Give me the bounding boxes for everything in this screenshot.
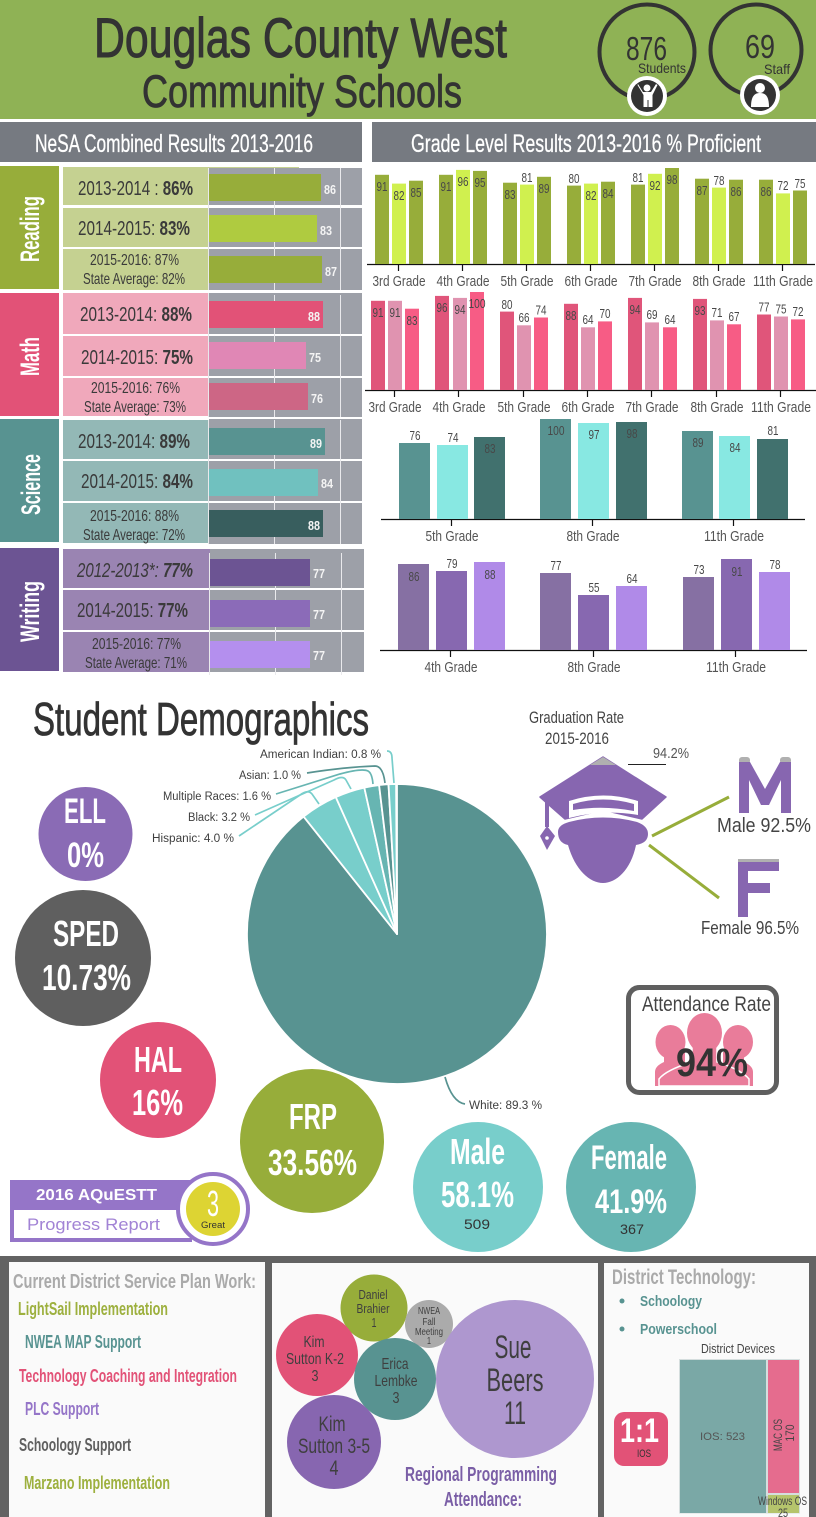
staff stat: Staff bbox=[764, 61, 790, 77]
bubble: Kim Sutton K-2: Kim bbox=[304, 1334, 324, 1351]
bar chart: writing by grade: 78 bbox=[770, 557, 780, 572]
panel: math combined results bbox=[0, 293, 362, 417]
panel: science combined results: 2013-2014: 89% bbox=[78, 431, 190, 453]
attendance rate box: Attendance Rate bbox=[642, 993, 771, 1016]
bar chart: math by grade: 83 bbox=[406, 313, 418, 328]
bar chart: math by grade: 77 bbox=[758, 300, 770, 314]
bubble: Sue Beers: Beers bbox=[486, 1362, 544, 1398]
bar chart: math by grade: 6th Grade bbox=[562, 400, 614, 416]
bubble: Kim Sutton K-2 bbox=[276, 1314, 358, 1396]
bar chart: math by grade: 4th Grade bbox=[432, 400, 486, 416]
panel: writing combined results: 77 bbox=[313, 648, 325, 663]
bar chart: science by grade: 5th Grade bbox=[426, 529, 478, 545]
bar chart: math by grade: 7th Grade bbox=[626, 400, 678, 416]
panel: reading combined results bbox=[0, 166, 362, 290]
panel: math combined results: 88 bbox=[308, 309, 320, 324]
bar chart: reading by grade: 81 bbox=[522, 170, 532, 185]
bar chart: math by grade: 70 bbox=[600, 306, 610, 321]
bar chart: math by grade: 80 bbox=[502, 297, 512, 312]
bar chart: math by grade: 75 bbox=[776, 302, 786, 316]
bubble: Kim Sutton K-2: 3 bbox=[312, 1368, 319, 1385]
bubble: Sue Beers bbox=[436, 1300, 594, 1458]
bar chart: math by grade: 94 bbox=[630, 302, 640, 317]
bar chart: math by grade: 8th Grade bbox=[690, 400, 744, 416]
stat circle: male students: Male bbox=[450, 1131, 505, 1172]
bar chart: writing by grade: 77 bbox=[550, 558, 562, 573]
panel: district service plan: NWEA MAP Support bbox=[25, 1332, 141, 1352]
callout: 1:1 iOS bbox=[614, 1412, 668, 1466]
caption: regional programming bbox=[405, 1464, 557, 1511]
pie chart: race and ethnicity: Asian: 1.0 % bbox=[239, 770, 301, 782]
panel: writing combined results: 77 bbox=[313, 566, 325, 581]
icon: people bbox=[655, 1013, 753, 1086]
students stat: 876 bbox=[626, 30, 667, 67]
AQuESTT progress report badge bbox=[10, 1174, 248, 1244]
stat circle: SPED: SPED bbox=[53, 913, 119, 954]
panel: reading combined results: 2013-2014 : 86% bbox=[78, 178, 193, 200]
bottom band background bbox=[0, 1256, 816, 1517]
stat circle: female students: 367 bbox=[620, 1221, 644, 1237]
bar chart: math by grade: 64 bbox=[582, 312, 594, 327]
bar chart: math by grade: 88 bbox=[566, 308, 576, 323]
bar chart: reading by grade: 6th Grade bbox=[564, 274, 618, 290]
bar chart: reading by grade: 80 bbox=[568, 171, 580, 186]
bar chart: math by grade: 5th Grade bbox=[498, 400, 550, 416]
pie chart: race and ethnicity: Black: 3.2 % bbox=[188, 812, 250, 824]
bubble: Kim Sutton 3-5 bbox=[287, 1395, 381, 1489]
panel: science combined results: 88 bbox=[308, 518, 320, 533]
attendance rate box bbox=[628, 988, 776, 1092]
panel: writing combined results: Writing bbox=[15, 581, 45, 642]
bar chart: math by grade: 96 bbox=[436, 300, 448, 315]
stat circle: SPED bbox=[15, 890, 151, 1026]
bubble: Erica Lembke: 3 bbox=[392, 1390, 400, 1407]
icon: letter F: Female 96.5% bbox=[701, 918, 799, 938]
bubble: NWEA Fall Meeting: 1 bbox=[427, 1336, 431, 1347]
bubble: Daniel Brahier: Brahier bbox=[356, 1301, 390, 1316]
panel: math combined results: 75 bbox=[309, 350, 321, 365]
panel: district technology bbox=[604, 1263, 809, 1517]
panel: district service plan: Marzano Implementation bbox=[24, 1473, 170, 1493]
AQuESTT progress report badge: 3 bbox=[207, 1183, 219, 1224]
list: platforms bbox=[620, 1293, 717, 1338]
bar chart: science by grade: 8th Grade bbox=[566, 529, 620, 545]
bar chart: writing by grade: 8th Grade bbox=[568, 660, 620, 676]
panel: math combined results: 2015-2016: 76% bbox=[91, 380, 180, 397]
caption: regional programming: Regional Programming bbox=[405, 1464, 557, 1486]
AQuESTT progress report badge: 2016 AQuESTT bbox=[36, 1187, 157, 1204]
stat circle: female students bbox=[566, 1122, 696, 1252]
panel: science combined results: Science bbox=[16, 454, 46, 515]
bar chart: reading by grade: 95 bbox=[474, 175, 486, 190]
bar chart: reading by grade: 84 bbox=[602, 186, 614, 201]
bar chart: math by grade: 74 bbox=[536, 302, 546, 318]
bar chart: science by grade: 81 bbox=[768, 423, 778, 438]
bar chart: science by grade: 97 bbox=[588, 427, 600, 442]
panel: writing combined results: 2014-2015: 77% bbox=[77, 600, 188, 622]
bar chart: reading by grade: 96 bbox=[458, 174, 468, 189]
bar chart: math by grade: 67 bbox=[728, 309, 740, 324]
bar chart: reading by grade: 78 bbox=[714, 173, 724, 188]
bar chart: math by grade: 93 bbox=[694, 303, 706, 318]
bar chart: math by grade: 66 bbox=[518, 310, 530, 325]
panel: district technology: District Technology: bbox=[612, 1266, 756, 1289]
staff stat bbox=[710, 4, 802, 115]
bar chart: science by grade: 11th Grade bbox=[704, 529, 764, 545]
bar chart: science by grade bbox=[381, 419, 805, 545]
bar chart: reading by grade: 91 bbox=[440, 179, 452, 194]
stat circle: FRP: FRP bbox=[289, 1096, 337, 1137]
treemap: district devices: MAC OS bbox=[771, 1419, 785, 1451]
stat circle: male students bbox=[413, 1122, 543, 1252]
panel: district service plan: Technology Coaching and Integration bbox=[19, 1366, 237, 1386]
callout: 1:1 iOS: 1:1 bbox=[620, 1412, 659, 1450]
bar chart: writing by grade: 88 bbox=[484, 567, 496, 582]
panel: math combined results: 2013-2014: 88% bbox=[80, 304, 192, 326]
bubble: Kim Sutton 3-5: 4 bbox=[330, 1457, 339, 1480]
bubble: Sue Beers: Sue bbox=[494, 1329, 532, 1365]
bar chart: reading by grade bbox=[367, 168, 815, 290]
bar chart: reading by grade: 89 bbox=[538, 181, 550, 196]
panel: district service plan bbox=[9, 1262, 265, 1517]
bar chart: math by grade: 71 bbox=[712, 305, 722, 320]
callout: 1:1 iOS: IOS bbox=[637, 1448, 651, 1460]
panel: reading combined results: 86 bbox=[324, 182, 336, 197]
AQuESTT progress report badge: Progress Report bbox=[27, 1215, 160, 1234]
graduation rate block: 94.2% bbox=[653, 745, 689, 762]
panel: reading combined results: Reading bbox=[15, 196, 45, 262]
bar chart: writing by grade: 64 bbox=[626, 571, 638, 586]
bar chart: science by grade: 89 bbox=[692, 435, 704, 450]
bar chart: reading by grade: 91 bbox=[376, 179, 388, 194]
stat circle: HAL: HAL bbox=[134, 1039, 182, 1080]
bar chart: reading by grade: 81 bbox=[632, 170, 644, 185]
bar chart: reading by grade: 85 bbox=[410, 185, 422, 200]
bar chart: writing by grade: 4th Grade bbox=[424, 660, 478, 676]
bar chart: reading by grade: 3rd Grade bbox=[372, 274, 426, 290]
panel: science combined results: 84 bbox=[321, 476, 334, 491]
panel: science combined results: State Average: 72% bbox=[83, 527, 185, 544]
treemap: district devices: IOS: 523 bbox=[700, 1431, 745, 1443]
title: Douglas County West bbox=[94, 6, 507, 69]
caption: regional programming: Attendance: bbox=[444, 1489, 522, 1511]
panel: science combined results: 89 bbox=[310, 436, 322, 451]
stat circle: male students: 58.1% bbox=[441, 1174, 514, 1215]
treemap: district devices bbox=[679, 1341, 807, 1517]
stat circle: HAL: 16% bbox=[132, 1082, 183, 1123]
bubble: NWEA Fall Meeting: Fall bbox=[422, 1317, 436, 1328]
bar chart: writing by grade: 91 bbox=[732, 564, 742, 579]
stat circle: HAL bbox=[100, 1022, 216, 1138]
list: platforms: Powerschool bbox=[640, 1321, 717, 1338]
panel: district service plan: LightSail Implementation bbox=[18, 1299, 168, 1319]
icon: letter F bbox=[701, 859, 799, 938]
icon: letter M bbox=[717, 757, 811, 837]
panel: writing combined results: State Average: 71% bbox=[85, 655, 187, 672]
bubble: Daniel Brahier: Daniel bbox=[358, 1287, 388, 1302]
bar chart: reading by grade: 83 bbox=[504, 187, 516, 202]
bar chart: reading by grade: 75 bbox=[794, 176, 806, 191]
panel: math combined results: 2014-2015: 75% bbox=[81, 347, 193, 369]
panel: science combined results bbox=[0, 419, 362, 544]
stat circle: ELL: ELL bbox=[64, 792, 106, 831]
students stat bbox=[600, 4, 694, 116]
pie chart: race and ethnicity: American Indian: 0.8 % bbox=[260, 749, 381, 761]
bar chart: reading by grade: 82 bbox=[394, 188, 404, 203]
pie chart: race and ethnicity: White: 89.3 % bbox=[469, 1100, 542, 1112]
bar chart: writing by grade: 79 bbox=[446, 556, 458, 571]
panel: reading combined results: 2015-2016: 87% bbox=[90, 252, 179, 269]
heading: NeSA combined results bbox=[0, 122, 362, 162]
panel: district service plan: Current District Service Plan Work: bbox=[13, 1271, 256, 1293]
stat circle: female students: 41.9% bbox=[595, 1183, 667, 1221]
panel: reading combined results: 87 bbox=[325, 264, 337, 279]
bubble: NWEA Fall Meeting: Meeting bbox=[415, 1327, 443, 1338]
bar chart: writing by grade: 11th Grade bbox=[706, 660, 766, 676]
AQuESTT progress report badge: Great bbox=[201, 1220, 226, 1230]
stat circle: SPED: 10.73% bbox=[42, 957, 131, 998]
bar chart: reading by grade: 8th Grade bbox=[692, 274, 746, 290]
attendance rate box: 94% bbox=[676, 1041, 748, 1085]
bubble: Daniel Brahier: 1 bbox=[372, 1315, 376, 1330]
staff stat: 69 bbox=[745, 28, 775, 65]
bar chart: reading by grade: 4th Grade bbox=[436, 274, 490, 290]
bar chart: science by grade: 98 bbox=[626, 426, 638, 441]
bar chart: reading by grade: 92 bbox=[650, 178, 660, 193]
graduation rate block bbox=[529, 708, 811, 938]
bar chart: math by grade: 100 bbox=[468, 296, 486, 311]
pie chart: race and ethnicity: Hispanic: 4.0 % bbox=[152, 833, 234, 845]
bar chart: reading by grade: 86 bbox=[760, 184, 772, 199]
bar chart: science by grade: 76 bbox=[410, 428, 420, 443]
bar chart: reading by grade: 86 bbox=[730, 184, 742, 199]
bar chart: reading by grade: 87 bbox=[696, 183, 708, 198]
bar chart: writing by grade: 55 bbox=[588, 580, 600, 595]
bar chart: reading by grade: 72 bbox=[778, 178, 788, 193]
bubble: Kim Sutton 3-5: Sutton 3-5 bbox=[298, 1435, 370, 1458]
bar chart: reading by grade: 5th Grade bbox=[500, 274, 554, 290]
bar chart: science by grade: 100 bbox=[548, 423, 564, 438]
stat circle: female students: Female bbox=[591, 1139, 667, 1177]
stat circle: ELL bbox=[38, 787, 132, 881]
heading: student demographics: Student Demographics bbox=[33, 693, 369, 745]
panel: reading combined results: 83 bbox=[320, 223, 332, 238]
bubble: NWEA Fall Meeting: NWEA bbox=[418, 1306, 440, 1317]
panel: reading combined results: State Average: 82% bbox=[83, 271, 185, 288]
pie chart: race and ethnicity bbox=[152, 749, 547, 1112]
bar chart: math by grade: 3rd Grade bbox=[368, 400, 422, 416]
bubble: Erica Lembke: Lembke bbox=[374, 1373, 418, 1390]
bar chart: science by grade: 84 bbox=[730, 440, 740, 455]
bar chart: reading by grade: 82 bbox=[586, 188, 596, 203]
bar chart: math by grade: 94 bbox=[454, 302, 466, 317]
panel: district service plan: Schoology Support bbox=[19, 1435, 131, 1455]
title: Community Schools bbox=[142, 66, 462, 117]
title bbox=[94, 6, 507, 117]
bar chart: science by grade: 74 bbox=[448, 430, 458, 445]
panel: reading combined results: 2014-2015: 83% bbox=[78, 218, 190, 240]
bar chart: writing by grade bbox=[380, 556, 807, 676]
bubble: Kim Sutton 3-5: Kim bbox=[318, 1413, 346, 1436]
bar chart: writing by grade: 86 bbox=[408, 569, 420, 584]
students stat: Students bbox=[638, 60, 686, 76]
bubble: Sue Beers: 11 bbox=[504, 1395, 526, 1431]
panel: writing combined results: 2012-2013*: 77% bbox=[76, 560, 193, 582]
stat circle: male students: 509 bbox=[464, 1216, 490, 1232]
bubble: Daniel Brahier bbox=[340, 1274, 408, 1342]
bar chart: math by grade: 69 bbox=[646, 307, 658, 322]
treemap: district devices: District Devices bbox=[701, 1341, 775, 1356]
bubble: Erica Lembke bbox=[354, 1338, 436, 1420]
panel: math combined results: State Average: 73% bbox=[84, 399, 186, 416]
panel: math combined results: 76 bbox=[311, 391, 323, 406]
header band bbox=[0, 0, 816, 119]
panel: math combined results: Math bbox=[15, 337, 45, 376]
panel: regional programming attendance bbox=[272, 1263, 598, 1517]
bar chart: math by grade: 72 bbox=[792, 304, 804, 319]
heading: NeSA combined results: NeSA Combined Results 2013-2016 bbox=[35, 130, 313, 158]
treemap: district devices: 170 bbox=[783, 1424, 797, 1442]
bar chart: math by grade: 91 bbox=[372, 305, 384, 320]
bubble: NWEA Fall Meeting bbox=[405, 1300, 453, 1348]
bar chart: math by grade: 91 bbox=[390, 305, 400, 320]
icon: graduate bbox=[540, 757, 666, 883]
graduation rate block: 2015-2016 bbox=[545, 729, 609, 748]
bar chart: science by grade: 83 bbox=[484, 441, 496, 456]
graduation rate block: Graduation Rate bbox=[529, 708, 624, 727]
bar chart: math by grade bbox=[365, 292, 816, 416]
heading: grade level results bbox=[372, 122, 816, 162]
bubble: Erica Lembke: Erica bbox=[382, 1356, 409, 1373]
panel: writing combined results bbox=[0, 548, 364, 675]
panel: science combined results: 2015-2016: 88% bbox=[90, 508, 179, 525]
bar chart: reading by grade: 98 bbox=[666, 172, 678, 187]
stat circle: FRP bbox=[240, 1069, 384, 1213]
panel: district service plan: PLC Support bbox=[25, 1399, 99, 1419]
panel: writing combined results: 77 bbox=[313, 607, 325, 622]
pie chart: race and ethnicity: Multiple Races: 1.6 % bbox=[163, 791, 271, 803]
stat circle: FRP: 33.56% bbox=[268, 1142, 357, 1183]
bar chart: math by grade: 64 bbox=[664, 312, 676, 327]
bar chart: writing by grade: 73 bbox=[694, 562, 704, 577]
panel: writing combined results: 2015-2016: 77% bbox=[92, 636, 181, 653]
bar chart: reading by grade: 7th Grade bbox=[628, 274, 682, 290]
bubble: Kim Sutton K-2: Sutton K-2 bbox=[286, 1351, 344, 1368]
stat circle: ELL: 0% bbox=[67, 836, 104, 875]
panel: science combined results: 2014-2015: 84% bbox=[81, 471, 193, 493]
list: platforms: Schoology bbox=[640, 1293, 703, 1310]
